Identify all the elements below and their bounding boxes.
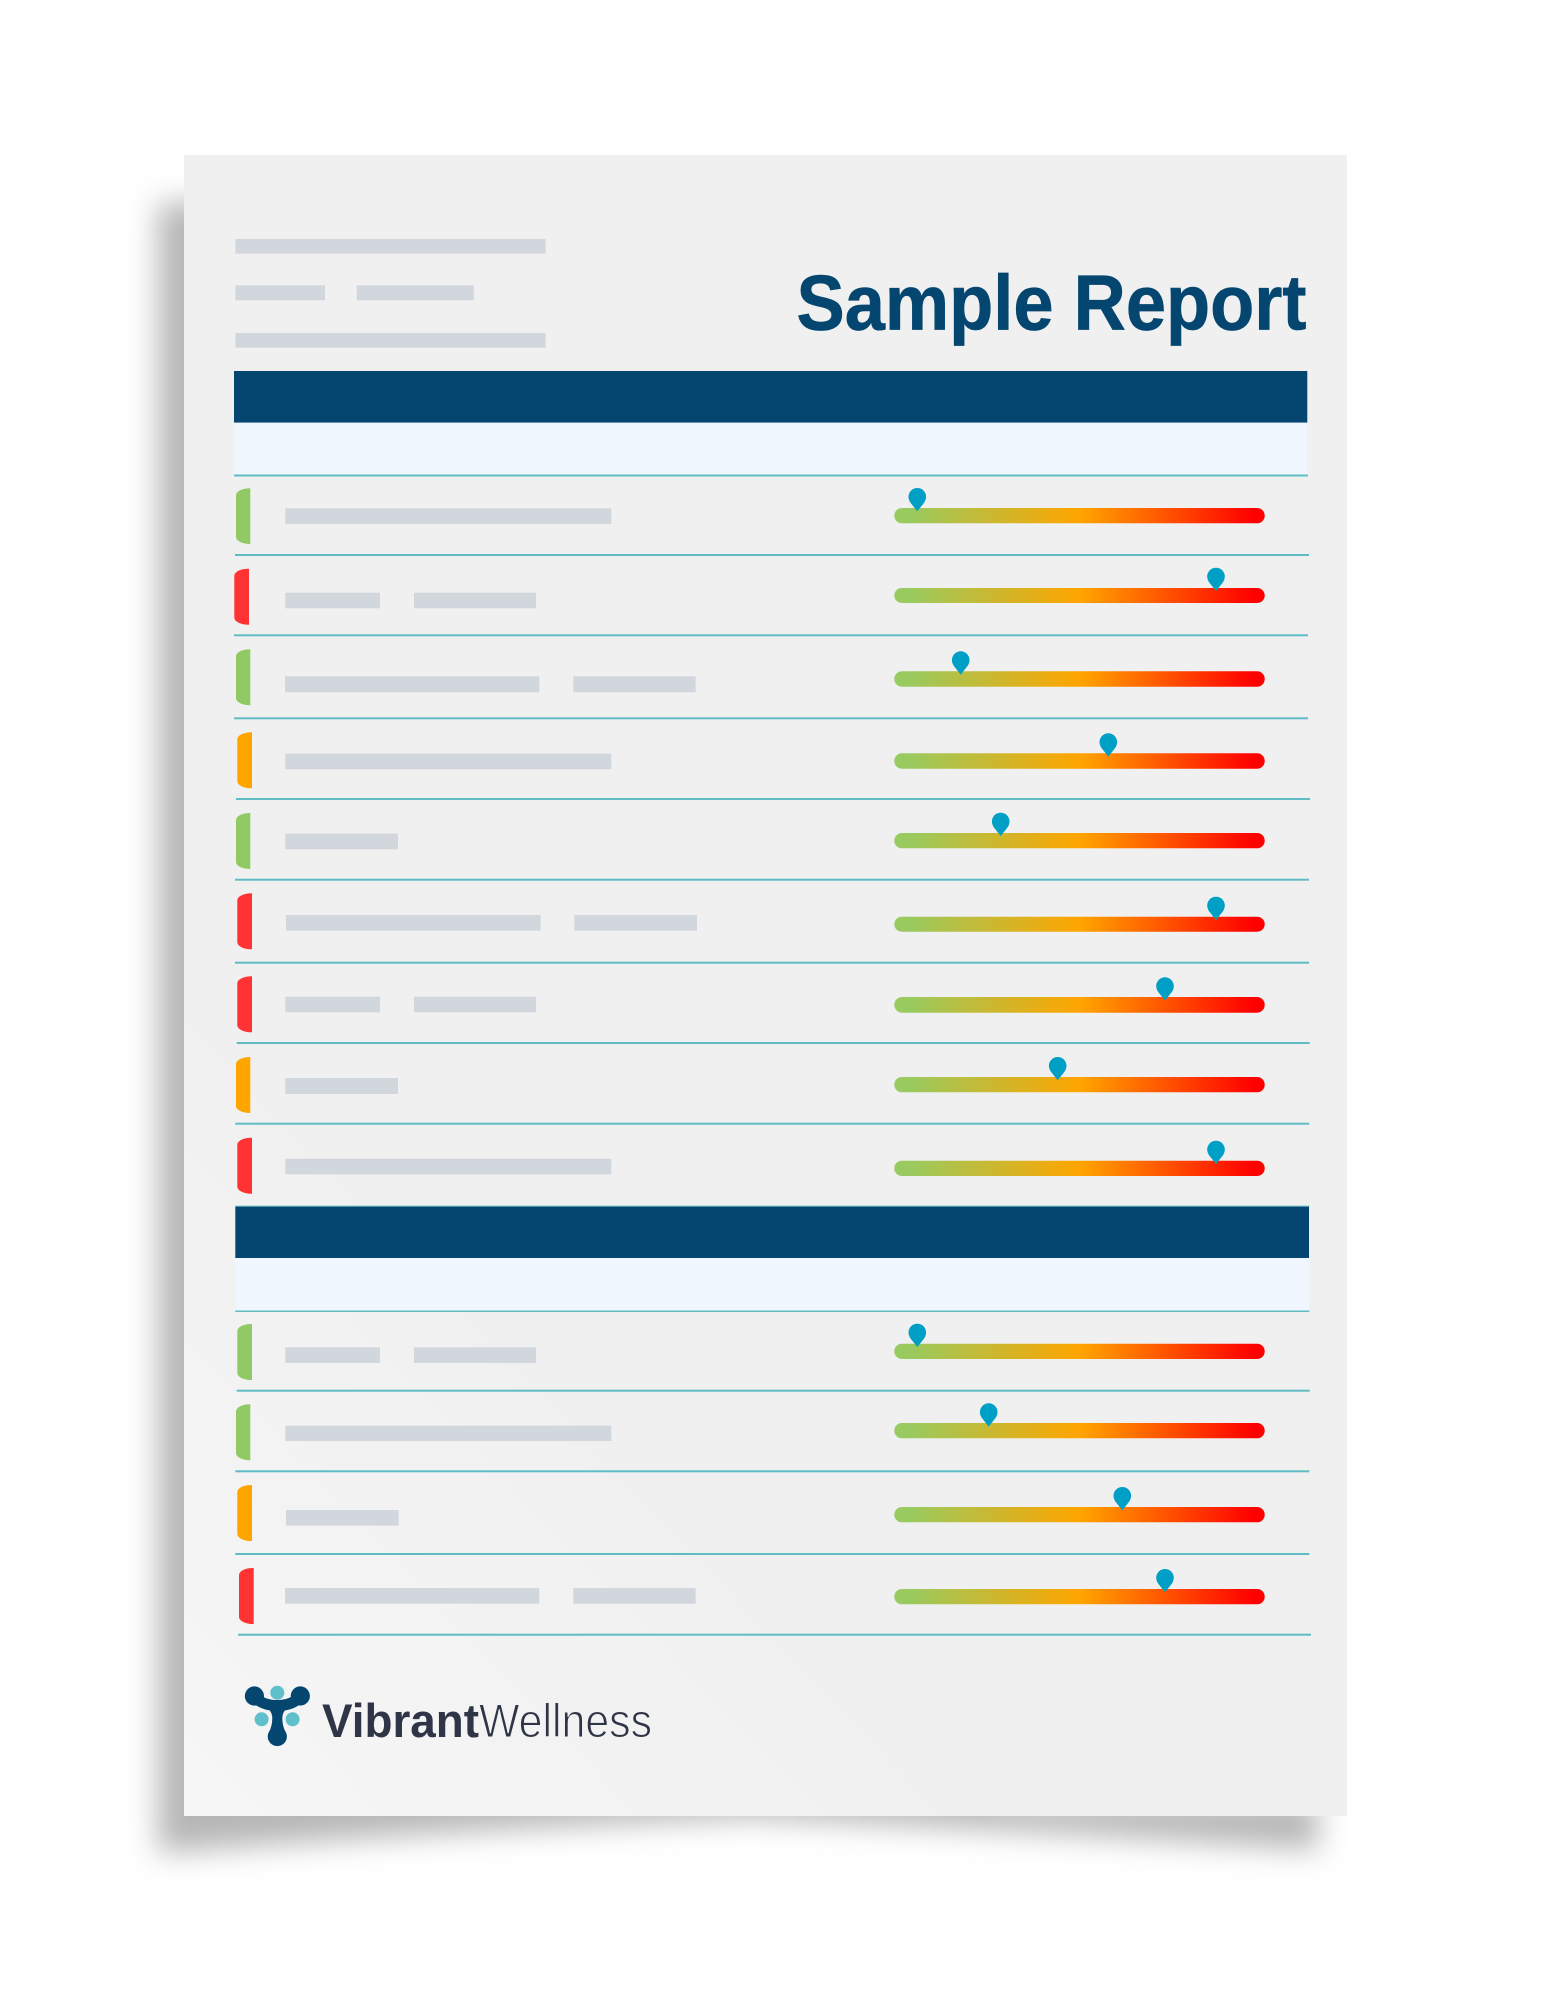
- status tab: red: [237, 976, 252, 1032]
- gradient range bar: [894, 1507, 1265, 1522]
- status tab: green: [236, 813, 250, 869]
- row 2: [234, 568, 1265, 625]
- section 2 subheader band: [235, 1258, 1309, 1310]
- status tab: green: [237, 1324, 252, 1380]
- label placeholder: [285, 508, 611, 524]
- section 1 header band: [234, 371, 1307, 423]
- gradient range bar: [894, 1423, 1265, 1438]
- gradient range bar: [894, 671, 1265, 687]
- row 13: [239, 1568, 1265, 1624]
- gradient range bar: [894, 1077, 1265, 1092]
- status tab: red: [234, 569, 249, 625]
- status tab: orange: [237, 1485, 252, 1541]
- marker pin: [1207, 897, 1225, 920]
- wordmark: Vibrant: Vibrant: [322, 1695, 479, 1748]
- row 11: [236, 1403, 1265, 1460]
- status tab: red: [237, 1138, 252, 1194]
- label placeholder: [285, 997, 536, 1012]
- title: Sample Report: [796, 258, 1307, 346]
- gradient range bar: [894, 997, 1265, 1013]
- marker pin: [1114, 1487, 1131, 1510]
- marker pin: [1207, 1141, 1225, 1164]
- status tab: green: [236, 1404, 250, 1460]
- wordmark: Wellness: Wellness: [479, 1695, 652, 1748]
- row 12: [237, 1485, 1265, 1541]
- patient info placeholder lines: [235, 239, 546, 348]
- gradient range bar: [894, 833, 1265, 848]
- marker pin: [1049, 1057, 1066, 1080]
- marker pin: [908, 488, 926, 511]
- gradient range bar: [894, 508, 1265, 523]
- icon: logo mark: [245, 1686, 310, 1746]
- label placeholder: [286, 1510, 399, 1526]
- label placeholder: [285, 593, 536, 608]
- marker pin: [1156, 977, 1174, 1001]
- label placeholder: [285, 676, 696, 692]
- marker pin: [908, 1324, 926, 1347]
- gradient range bar: [894, 1344, 1265, 1359]
- row 8: [236, 1057, 1265, 1113]
- marker pin: [952, 651, 970, 675]
- marker pin: [1207, 568, 1225, 591]
- label placeholder: [285, 1078, 398, 1094]
- gradient range bar: [894, 1161, 1265, 1176]
- row 9: [237, 1138, 1265, 1194]
- section 1 subheader band: [234, 423, 1307, 475]
- row 7: [237, 976, 1265, 1032]
- report sheet: [184, 155, 1347, 1816]
- status tab: orange: [237, 732, 252, 788]
- row 6: [237, 893, 1265, 949]
- row 5: [236, 813, 1265, 869]
- row 4: [237, 732, 1265, 788]
- label placeholder: [285, 1159, 611, 1174]
- gradient range bar: [894, 588, 1265, 603]
- marker pin: [980, 1403, 998, 1427]
- status tab: red: [237, 893, 252, 949]
- marker pin: [1100, 733, 1117, 757]
- status tab: green: [236, 488, 250, 544]
- row 10: [237, 1324, 1265, 1380]
- Vibrant Wellness logo: [245, 1686, 652, 1748]
- label placeholder: [285, 754, 611, 769]
- status tab: red: [239, 1568, 254, 1624]
- label placeholder: [285, 1347, 536, 1363]
- row 3: [236, 649, 1265, 705]
- status tab: green: [236, 649, 250, 705]
- label placeholder: [285, 834, 398, 849]
- marker pin: [992, 813, 1010, 836]
- gradient range bar: [894, 1589, 1265, 1604]
- gradient range bar: [894, 917, 1265, 932]
- label placeholder: [285, 1426, 611, 1441]
- row 1: [236, 488, 1265, 544]
- paper shadow: [158, 203, 1318, 1853]
- gradient range bar: [894, 753, 1265, 769]
- status tab: orange: [236, 1057, 250, 1113]
- section 2 header band: [235, 1207, 1309, 1258]
- label placeholder: [285, 1588, 696, 1604]
- marker pin: [1156, 1569, 1174, 1592]
- label placeholder: [286, 915, 697, 931]
